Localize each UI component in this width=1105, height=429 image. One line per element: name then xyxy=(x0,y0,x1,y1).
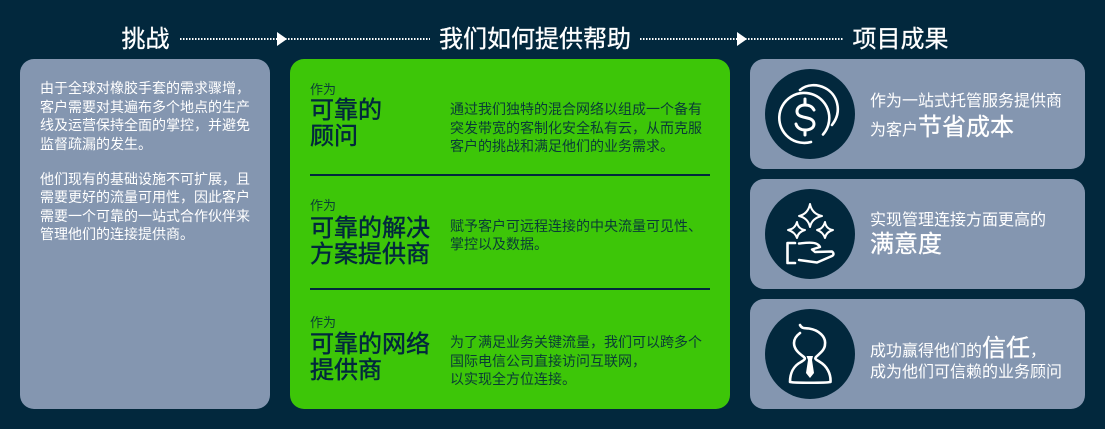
title: trusted solution provider: 可靠的解决 xyxy=(310,215,430,242)
label: as 3: 作为 xyxy=(310,315,336,330)
text: trust: 成为他们可信赖的业务顾问 xyxy=(870,364,1062,381)
text: advisor description: 突发带宽的客制化安全私有云，从而克服 xyxy=(450,120,702,136)
text: challenge paragraph 2 xyxy=(40,170,250,242)
text: challenge paragraph 1: 监督疏漏的发生。 xyxy=(40,136,152,152)
text: solution description: 赋予客户可远程连接的中央流量可见性、 xyxy=(450,218,702,234)
text: solution description: 掌控以及数据。 xyxy=(450,236,548,252)
panel: cost saving xyxy=(750,59,1085,169)
text: challenge paragraph 2: 需要更好的流量可用性，因此客户 xyxy=(40,189,250,205)
title: trusted advisor: 可靠的 xyxy=(310,97,382,124)
text: challenge paragraph 1: 由于全球对橡胶手套的需求骤增， xyxy=(40,80,250,96)
text: network description: 以实现全方位连接。 xyxy=(450,371,576,387)
title: trusted network provider: 可靠的网络 xyxy=(310,331,430,358)
text: challenge paragraph 1: 线及运营保持全面的掌控，并避免 xyxy=(40,117,250,133)
text: solution description xyxy=(450,218,702,252)
text: satisfaction: 满意度 xyxy=(870,231,942,258)
heading: challenge: 挑战 xyxy=(122,26,170,53)
text: cost saving xyxy=(870,92,1062,141)
text: trust: 成功赢得他们的信任， xyxy=(870,335,1046,362)
icon: person with tie xyxy=(765,309,855,399)
text: network description xyxy=(450,334,702,387)
arrow: help to results xyxy=(640,32,842,46)
label: as 2: 作为 xyxy=(310,198,336,213)
title: trusted network provider xyxy=(310,331,430,384)
panel: trust xyxy=(750,299,1085,409)
text: network description: 国际电信公司直接访问互联网， xyxy=(450,352,646,368)
text: satisfaction: 实现管理连接方面更高的 xyxy=(870,212,1046,229)
panel: how we help xyxy=(290,59,730,409)
title: trusted solution provider: 方案提供商 xyxy=(310,241,430,268)
text: challenge paragraph 2: 需要一个可靠的一站式合作伙伴来 xyxy=(40,208,250,224)
arrow: challenge to help xyxy=(180,32,430,46)
text: advisor description xyxy=(450,101,702,154)
text: challenge paragraph 1 xyxy=(40,80,250,152)
text: advisor description: 通过我们独特的混合网络以组成一个备有 xyxy=(450,101,702,117)
text: cost saving: 为客户节省成本 xyxy=(870,114,1014,141)
panel: satisfaction xyxy=(750,179,1085,289)
text: trust xyxy=(870,335,1062,381)
heading: project results: 项目成果 xyxy=(852,26,948,53)
title: trusted advisor xyxy=(310,97,382,150)
text: challenge paragraph 2: 他们现有的基础设施不可扩展，且 xyxy=(40,170,250,186)
panel: challenge xyxy=(20,59,270,409)
text: network description: 为了满足业务关键流量，我们可以跨多个 xyxy=(450,334,702,350)
heading: how we help: 我们如何提供帮助 xyxy=(439,26,631,53)
text: challenge paragraph 1: 客户需要对其遍布多个地点的生产 xyxy=(40,98,250,114)
title: trusted solution provider xyxy=(310,215,430,268)
text: challenge paragraph 2: 管理他们的连接提供商。 xyxy=(40,226,194,242)
icon: coins xyxy=(765,69,855,159)
icon: hand with sparkles xyxy=(765,189,855,279)
text: satisfaction xyxy=(870,211,1046,258)
text: advisor description: 客户的挑战和满足他们的业务需求。 xyxy=(450,138,674,154)
title: trusted advisor: 顾问 xyxy=(310,123,358,150)
label: as 1: 作为 xyxy=(310,82,336,97)
title: trusted network provider: 提供商 xyxy=(310,357,382,384)
text: cost saving: 作为一站式托管服务提供商 xyxy=(870,93,1062,110)
